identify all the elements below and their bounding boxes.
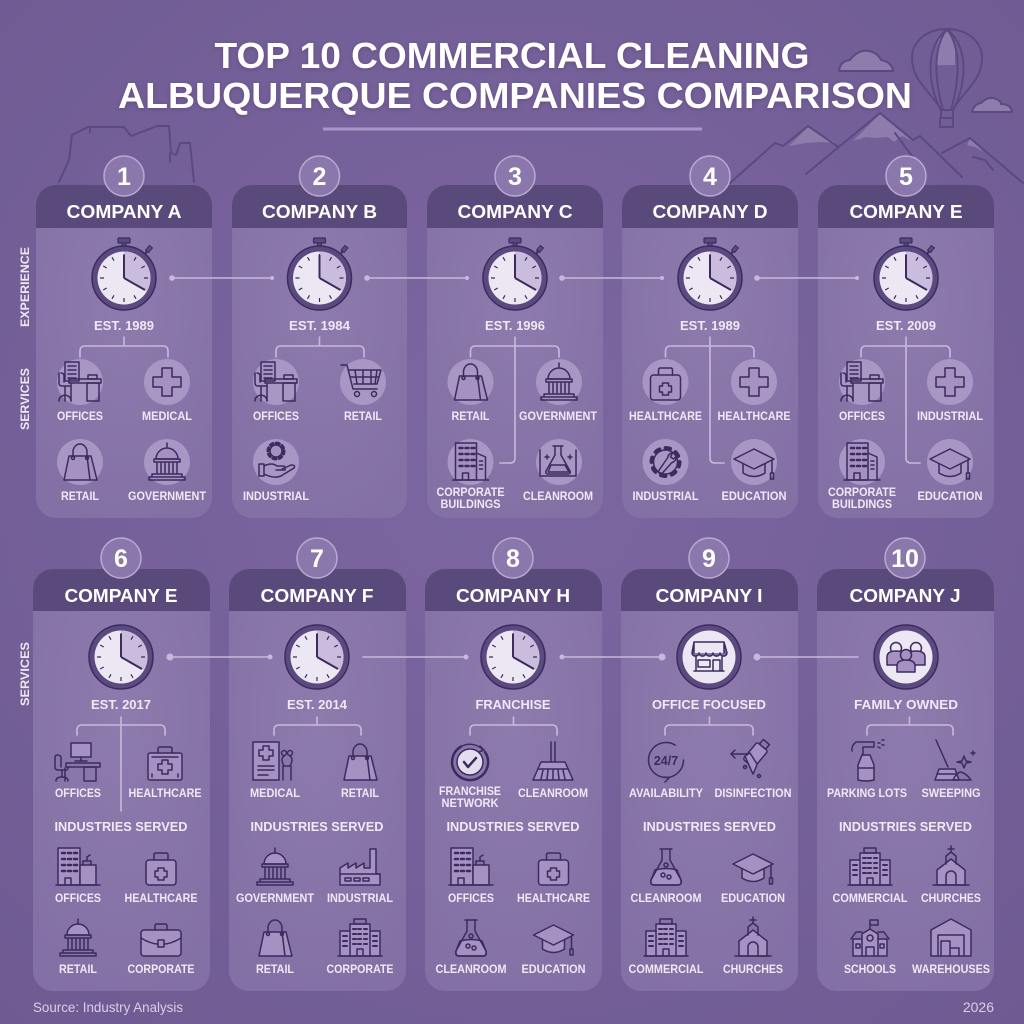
- industry: schools: [844, 920, 896, 976]
- tree lines: [274, 717, 361, 735]
- service: industrial: [243, 439, 309, 503]
- icon: stopwatch: [874, 238, 938, 310]
- industry: government: [236, 848, 315, 905]
- label: EST. 2014: [287, 697, 348, 712]
- tree lines: [470, 337, 559, 463]
- decoration: mesa outline: [59, 126, 194, 182]
- label: FRANCHISE: [476, 697, 551, 712]
- icon: clock: [285, 625, 349, 689]
- panel: company D: [622, 156, 798, 518]
- industry: education: [522, 925, 586, 976]
- service: disinfection: [714, 738, 792, 800]
- industry: retail: [256, 920, 294, 976]
- badge 2: 2: [313, 163, 326, 191]
- service: corporate buildings: CORPORATE: [828, 485, 896, 499]
- service: retail: RETAIL: [61, 489, 99, 503]
- header: company B: [232, 185, 407, 228]
- title: ALBUQUERQUE COMPANIES COMPARISON: [118, 75, 912, 116]
- service: franchise network: FRANCHISE: [439, 784, 501, 798]
- icon: storefront: [677, 625, 741, 689]
- panel: company B: [232, 156, 407, 518]
- badge 6: [101, 538, 141, 578]
- industry: offices: [55, 848, 101, 905]
- service: availability: AVAILABILITY: [629, 786, 703, 800]
- industry: commercial: COMMERCIAL: [832, 891, 908, 905]
- industry: healthcare: [124, 853, 198, 905]
- header: company J: [817, 569, 994, 611]
- industry: cleanroom: CLEANROOM: [630, 891, 702, 905]
- service: availability: 24/7: [654, 754, 678, 768]
- title: [118, 35, 912, 116]
- industry: commercial: COMMERCIAL: [628, 962, 704, 976]
- service: medical: [142, 359, 192, 423]
- label: EST. 2017: [91, 697, 151, 712]
- header: company I: [621, 569, 798, 611]
- service: corporate buildings: [828, 439, 896, 511]
- connectors top row: [169, 275, 859, 281]
- industry: warehouses: [912, 919, 990, 976]
- industry: commercial: [832, 848, 908, 905]
- industry: cleanroom: [436, 920, 506, 976]
- service: offices: OFFICES: [55, 786, 101, 800]
- panel: company E (6): [33, 538, 210, 991]
- subheading: industries served: INDUSTRIES SERVED: [54, 819, 188, 834]
- industry: cleanroom: CLEANROOM: [436, 962, 506, 976]
- badge 6: 6: [114, 545, 128, 573]
- header: company D: [622, 185, 798, 228]
- service: corporate buildings: [436, 439, 504, 511]
- tree lines: [665, 717, 753, 735]
- service: industrial: [632, 439, 698, 503]
- service: retail: [57, 439, 103, 503]
- badge 4: 4: [703, 163, 717, 191]
- service: offices: OFFICES: [253, 409, 299, 423]
- header: company C: [427, 185, 603, 228]
- panel: company H: [425, 538, 602, 991]
- company name: COMPANY C: [458, 202, 572, 222]
- industry: offices: OFFICES: [55, 891, 101, 905]
- label: FAMILY OWNED: [854, 697, 958, 712]
- icon: clock: [481, 625, 545, 689]
- side label: services bottom: SERVICES: [18, 642, 32, 706]
- service: offices: OFFICES: [839, 409, 885, 423]
- header: company E: [818, 185, 994, 228]
- service: government: [519, 359, 598, 423]
- company name: COMPANY F: [260, 586, 374, 606]
- panel: company F: [229, 538, 406, 991]
- icon: clock: [89, 625, 153, 689]
- industry: offices: OFFICES: [448, 891, 494, 905]
- company name: COMPANY B: [262, 202, 377, 222]
- industry: retail: RETAIL: [59, 962, 97, 976]
- tree lines: [276, 337, 364, 357]
- industry: industrial: INDUSTRIAL: [327, 891, 393, 905]
- service: franchise network: NETWORK: [442, 796, 499, 810]
- badge 7: 7: [310, 545, 324, 573]
- service: government: [128, 439, 207, 503]
- connectors bottom row: [166, 654, 858, 660]
- badge 4: [690, 156, 730, 196]
- industry: churches: CHURCHES: [921, 891, 981, 905]
- service: government: GOVERNMENT: [519, 409, 598, 423]
- service: healthcare: [128, 747, 202, 800]
- service: government: GOVERNMENT: [128, 489, 207, 503]
- service: parking lots: [827, 740, 907, 800]
- header: company A: [36, 185, 212, 228]
- industry: churches: CHURCHES: [723, 962, 783, 976]
- panel: company E: [818, 156, 994, 518]
- panel: company C: [427, 156, 603, 518]
- icon: stopwatch: [288, 238, 352, 310]
- icon: family: [874, 625, 938, 689]
- industry: churches: [921, 846, 981, 905]
- service: education: [722, 439, 786, 503]
- badge 8: [493, 538, 533, 578]
- industry: healthcare: HEALTHCARE: [517, 891, 590, 905]
- service: offices: [839, 359, 885, 423]
- service: cleanroom: CLEANROOM: [518, 786, 588, 800]
- service: retail: [340, 359, 386, 423]
- industry: retail: [59, 919, 97, 976]
- badge 9: [689, 538, 729, 578]
- industry: churches: [723, 917, 783, 976]
- industry: corporate: CORPORATE: [128, 962, 194, 976]
- badge 10: 10: [891, 545, 919, 573]
- decoration: mountains: [730, 113, 1023, 183]
- service: cleanroom: [518, 742, 588, 800]
- company name: COMPANY E: [850, 202, 962, 222]
- service: offices: [253, 359, 299, 423]
- service: corporate buildings: BUILDINGS: [832, 497, 892, 511]
- service: offices: [57, 359, 103, 423]
- service: industrial: INDUSTRIAL: [243, 489, 309, 503]
- company name: COMPANY I: [656, 586, 762, 606]
- badge 5: 5: [899, 163, 913, 191]
- badge 3: 3: [508, 163, 522, 191]
- service: industrial: [917, 359, 983, 423]
- subheading: industries served: INDUSTRIES SERVED: [250, 819, 384, 834]
- badge 8: 8: [506, 545, 520, 573]
- service: retail: RETAIL: [344, 409, 382, 423]
- service: education: EDUCATION: [722, 489, 786, 503]
- service: offices: OFFICES: [57, 409, 103, 423]
- service: industrial: INDUSTRIAL: [632, 489, 698, 503]
- service: sweeping: SWEEPING: [922, 786, 980, 800]
- header: company H: [425, 569, 602, 611]
- industry: corporate: CORPORATE: [326, 962, 394, 976]
- header: company E: [33, 569, 210, 611]
- tree lines: [666, 337, 754, 463]
- service: availability: [629, 742, 703, 800]
- badge 10: [885, 538, 925, 578]
- industry: corporate: [326, 919, 394, 976]
- service: education: EDUCATION: [918, 489, 982, 503]
- service: cleanroom: CLEANROOM: [523, 489, 593, 503]
- badge 2: [300, 156, 340, 196]
- subheading: industries served: INDUSTRIES SERVED: [643, 819, 776, 834]
- industry: industrial: [327, 849, 393, 905]
- service: healthcare: HEALTHCARE: [629, 409, 702, 423]
- title underline: [323, 128, 702, 130]
- badge 3: [495, 156, 535, 196]
- industry: healthcare: HEALTHCARE: [124, 891, 198, 905]
- source note: Source: Industry Analysis: [33, 999, 183, 1015]
- decoration: balloon and clouds: [839, 29, 1012, 127]
- company name: COMPANY J: [850, 586, 960, 606]
- industry: commercial: [628, 919, 704, 976]
- industry: cleanroom: [630, 849, 702, 905]
- icon: stopwatch: [678, 238, 742, 310]
- panel: company A: [36, 156, 212, 518]
- company name: COMPANY H: [456, 586, 570, 606]
- service: healthcare: [629, 359, 702, 423]
- service: retail: [448, 359, 494, 423]
- badge 5: [886, 156, 926, 196]
- subheading: industries served: INDUSTRIES SERVED: [839, 819, 972, 834]
- experience label: EST. 1989: [680, 318, 740, 333]
- service: parking lots: PARKING LOTS: [827, 786, 907, 800]
- service: industrial: INDUSTRIAL: [917, 409, 983, 423]
- service: cleanroom: [523, 439, 593, 503]
- side label: services top: SERVICES: [18, 368, 32, 430]
- badge 9: 9: [702, 545, 716, 573]
- industry: offices: [448, 848, 494, 905]
- service: retail: RETAIL: [341, 786, 379, 800]
- industry: government: GOVERNMENT: [236, 891, 315, 905]
- tree lines: [861, 337, 950, 463]
- icon: stopwatch: [483, 238, 547, 310]
- badge 1: [104, 156, 144, 196]
- service: sweeping: [922, 740, 980, 800]
- service: disinfection: DISINFECTION: [714, 786, 792, 800]
- service: medical: MEDICAL: [142, 409, 192, 423]
- industry: education: [721, 854, 785, 905]
- service: medical: MEDICAL: [250, 786, 300, 800]
- year: 2026: [963, 999, 994, 1015]
- service: healthcare: HEALTHCARE: [128, 786, 202, 800]
- experience label: EST. 2009: [876, 318, 936, 333]
- side label: experience: EXPERIENCE: [18, 247, 32, 327]
- title: TOP 10 COMMERCIAL CLEANING: [214, 35, 810, 76]
- service: healthcare cross: HEALTHCARE: [718, 409, 790, 423]
- badge 7: [297, 538, 337, 578]
- service: corporate buildings: CORPORATE: [436, 485, 504, 499]
- service: retail: RETAIL: [452, 409, 490, 423]
- experience label: EST. 1984: [289, 318, 351, 333]
- industry: corporate: [128, 924, 194, 976]
- experience label: EST. 1996: [485, 318, 545, 333]
- industry: healthcare: [517, 853, 590, 905]
- service: corporate buildings: BUILDINGS: [440, 497, 500, 511]
- company name: COMPANY E: [64, 586, 178, 606]
- tree lines: [470, 717, 557, 735]
- subheading: industries served: INDUSTRIES SERVED: [446, 819, 580, 834]
- header: company F: [229, 569, 406, 611]
- service: franchise network: [439, 744, 501, 810]
- industry: retail: RETAIL: [256, 962, 294, 976]
- company name: COMPANY A: [66, 202, 182, 222]
- tree lines: [77, 717, 165, 811]
- industry: education: EDUCATION: [721, 891, 785, 905]
- industry: education: EDUCATION: [522, 962, 586, 976]
- service: retail: [341, 744, 379, 800]
- icon: stopwatch: [92, 238, 156, 310]
- experience label: EST. 1989: [94, 318, 154, 333]
- label: OFFICE FOCUSED: [652, 697, 766, 712]
- service: offices: [55, 743, 101, 800]
- company name: COMPANY D: [652, 202, 768, 222]
- service: education: [918, 439, 982, 503]
- panel: company J: [817, 538, 994, 991]
- tree lines: [80, 337, 168, 357]
- industry: warehouses: WAREHOUSES: [912, 962, 990, 976]
- service: medical: [250, 742, 300, 800]
- service: healthcare cross: [718, 359, 790, 423]
- badge 1: 1: [117, 163, 131, 191]
- industry: schools: SCHOOLS: [844, 962, 896, 976]
- panel: company I: [621, 538, 798, 991]
- tree lines: [867, 717, 953, 735]
